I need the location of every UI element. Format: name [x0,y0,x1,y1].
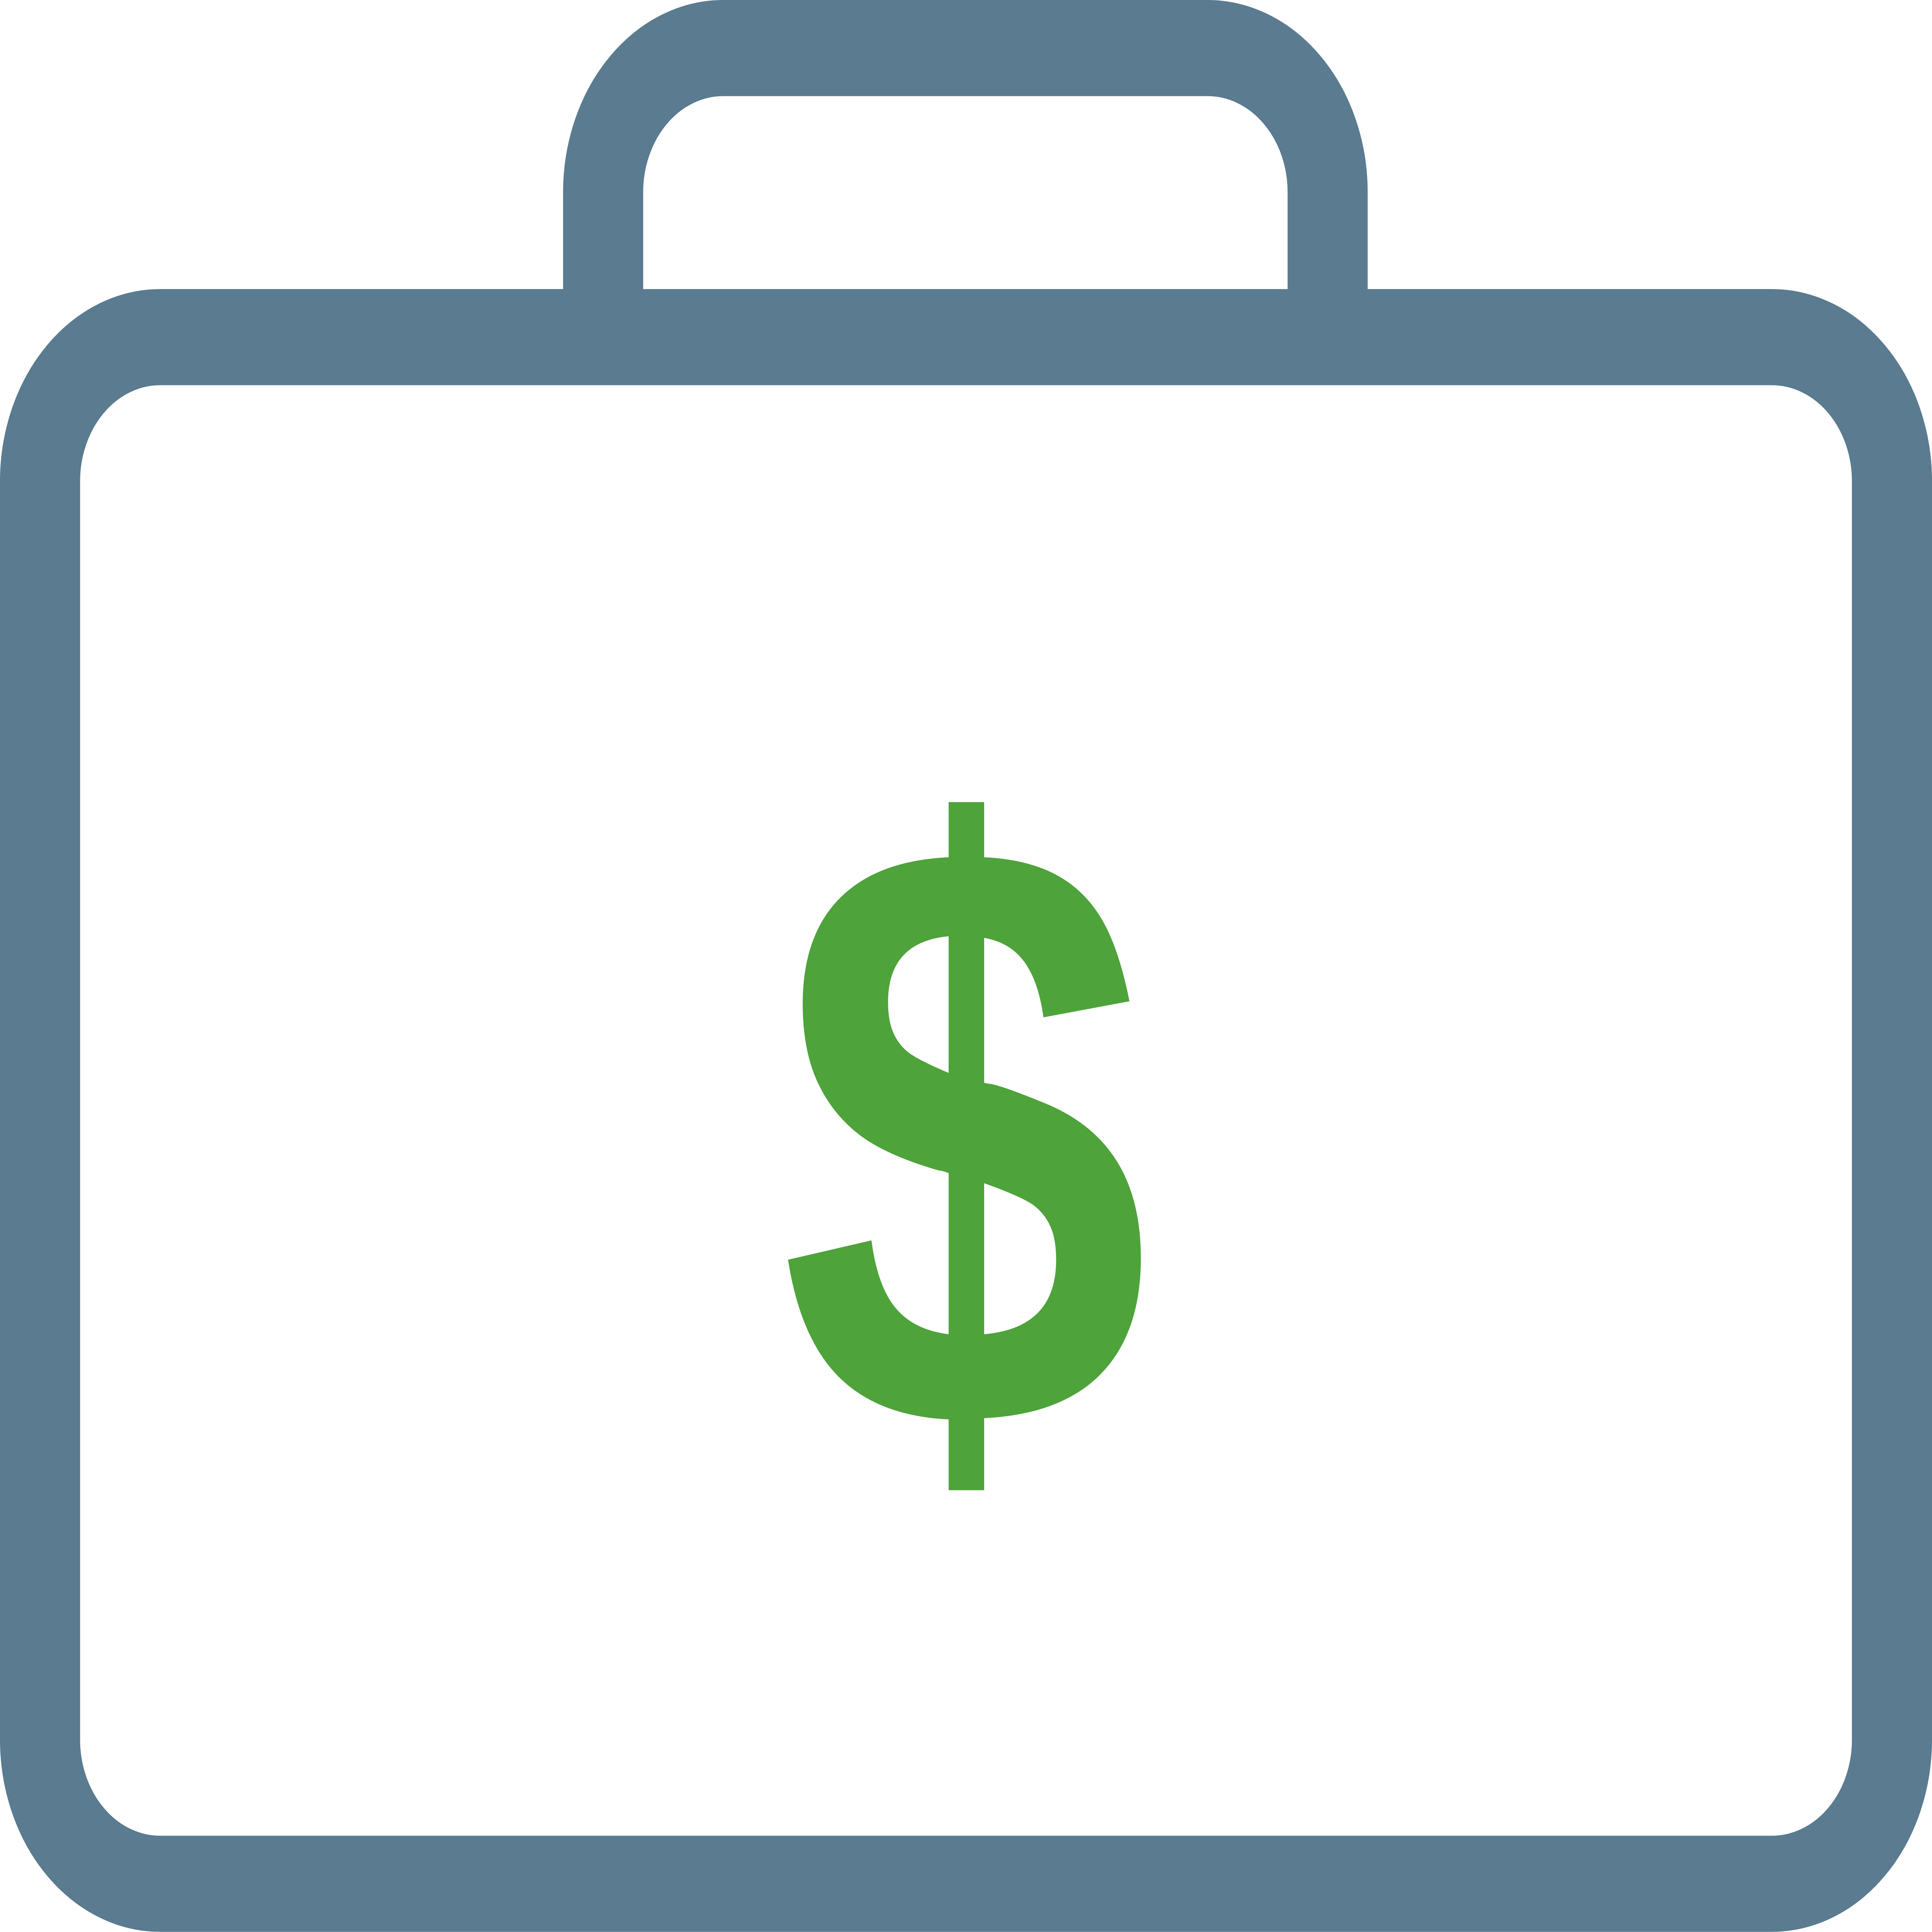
icon: briefcase body [40,337,1892,1884]
icon: briefcase handle [603,48,1328,337]
icon: dollar sign: $ [779,665,1150,1606]
